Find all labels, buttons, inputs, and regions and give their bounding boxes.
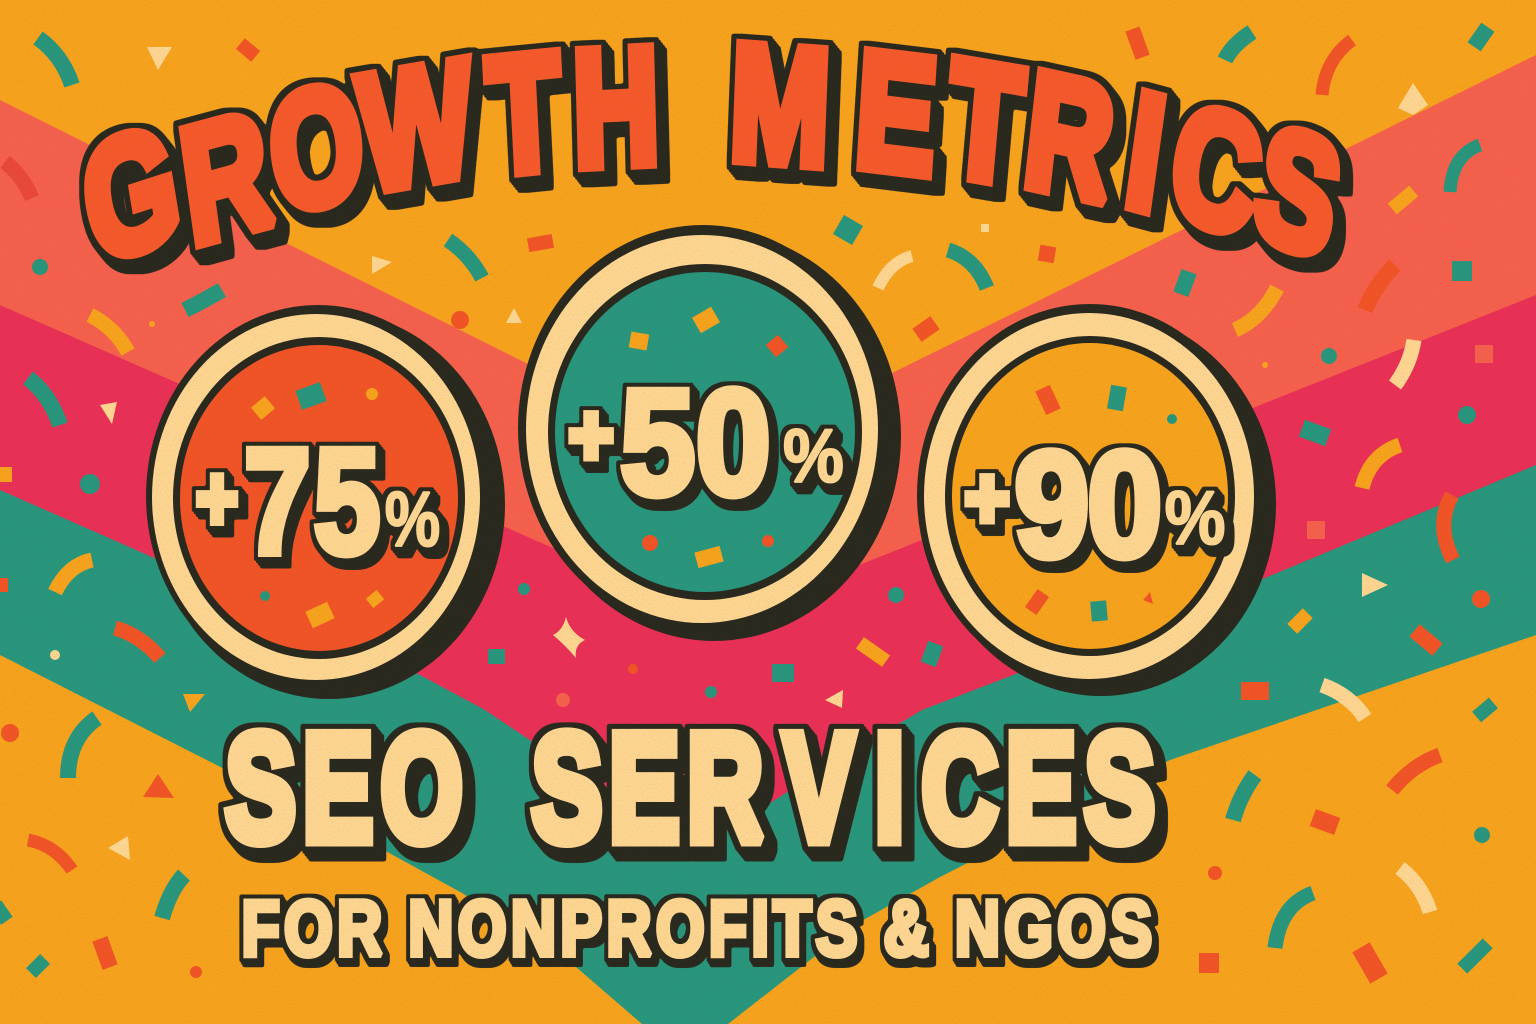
value: +90%: % [1165, 477, 1225, 561]
value: +75% [196, 417, 440, 585]
value: +50%: + [569, 388, 613, 483]
chevron band: coral [0, 55, 1536, 625]
stat badge: +90% [917, 304, 1276, 696]
badge ring: orange [917, 304, 1276, 696]
stat badge: +50% [518, 225, 901, 641]
badge ring: red-orange [146, 305, 505, 699]
value: +50%: % [783, 415, 844, 499]
chevron band: crimson [0, 295, 1536, 842]
badge ring: teal [518, 225, 901, 641]
heading: SEO Services: SEO SERVICES [226, 703, 1155, 873]
stat badge: +75% [146, 305, 505, 699]
value: +50% [569, 359, 844, 527]
value: +75%: 75 [244, 417, 380, 585]
value: +90%: 90 [1014, 421, 1162, 589]
value: +90%: + [965, 451, 1009, 546]
badge confetti [1025, 385, 1177, 622]
value: +75%: % [385, 475, 440, 563]
value: +50%: 50 [620, 359, 771, 527]
subheading: For Nonprofits & NGOs: FOR NONPROFITS & NGOS [242, 884, 1152, 972]
badge confetti [629, 307, 788, 568]
chevron band: teal [0, 465, 1536, 1024]
title: Growth Metrics: GROWTH METRICS [71, 10, 1353, 298]
badge confetti [251, 382, 384, 628]
value: +75%: + [196, 448, 238, 549]
value: +90% [965, 421, 1225, 589]
